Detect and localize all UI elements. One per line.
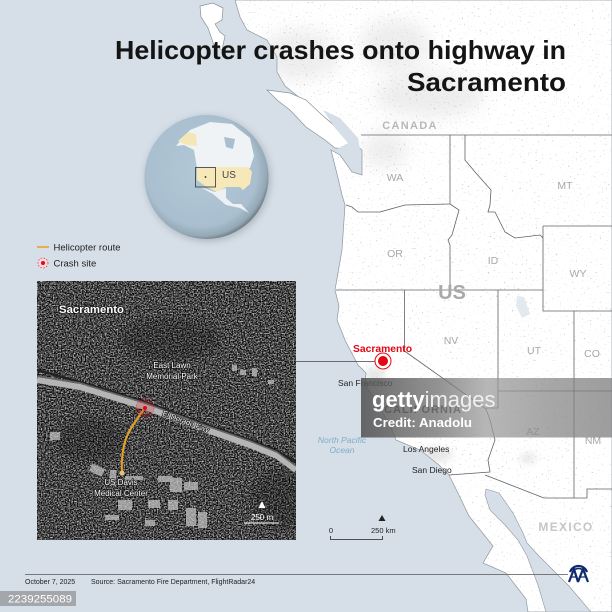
inset labels: [59, 304, 211, 498]
image ID tag: [0, 591, 76, 606]
date: October 7, 2025: [25, 579, 75, 586]
gulf of California and inland water: [323, 110, 591, 612]
inset scale bar: [244, 501, 279, 523]
inset label: El Dorado Fwy: El Dorado Fwy: [161, 409, 211, 435]
legend: helicopter route: Helicopter route: [54, 242, 121, 254]
map scale bar: 250 km: [371, 526, 396, 535]
state labels: MT: [557, 180, 573, 192]
route origin: [120, 470, 124, 476]
title line 2: Sacramento: [407, 67, 566, 97]
source: Source: Sacramento Fire Department, FlightRadar24: [91, 579, 255, 586]
legend: [37, 242, 121, 270]
state labels: NM: [585, 435, 601, 447]
state labels: UT: [527, 345, 542, 357]
Hudson Bay: [224, 137, 235, 149]
darker tree areas: [55, 318, 310, 530]
inset scale bar: 250 m: [251, 513, 273, 522]
state and country borders: [336, 135, 612, 498]
ocean label: North Pacific: [318, 435, 367, 445]
map scale bar: 0: [329, 526, 333, 535]
crash site marker: [136, 399, 154, 417]
title line 1: Helicopter crashes onto highway in: [115, 35, 566, 65]
freeway: [37, 370, 296, 470]
satellite inset map: [37, 281, 310, 540]
Sacramento label: Sacramento: [353, 343, 412, 355]
inset label: East Lawn Memorial Park: Memorial Park: [146, 372, 199, 381]
state labels: [387, 172, 601, 447]
land mass: [230, 0, 612, 612]
Anadolu Agency logo: [569, 566, 588, 582]
image ID tag: 2239255089: [8, 594, 72, 606]
globe label: US: US: [222, 170, 236, 181]
inset label: Sacramento: Sacramento: [59, 304, 124, 316]
map scale bar: [329, 515, 396, 540]
inset label: US Davis Medical Center: US Davis: [104, 478, 138, 487]
ocean label: Ocean: [329, 445, 355, 455]
country label: Mexico: MEXICO: [538, 520, 594, 534]
state labels: WY: [570, 268, 586, 280]
medical center buildings: [50, 365, 274, 528]
state labels: ID: [488, 255, 499, 267]
locator box: [196, 168, 216, 187]
Canada and north: [176, 122, 254, 168]
city label: San Diego: San Diego: [412, 465, 452, 475]
globe locator: [144, 115, 270, 241]
footer rule: [25, 574, 568, 576]
state labels: AZ: [526, 426, 540, 438]
state labels: CO: [584, 348, 600, 360]
state labels: OR: [387, 248, 403, 260]
Alaska: [178, 132, 197, 146]
contiguous United States: [197, 167, 252, 192]
inset label: US Davis Medical Center: Medical Center: [94, 489, 148, 498]
watermark: gettyimages: gettyimages: [372, 387, 495, 412]
islands: [200, 3, 358, 150]
legend: crash site: Crash site: [54, 258, 96, 270]
title: [115, 35, 566, 97]
city label: Los Angeles: Los Angeles: [403, 444, 449, 454]
Sacramento marker: [375, 353, 391, 369]
state labels: WA: [387, 172, 403, 184]
helicopter route line: [122, 408, 145, 473]
state labels: NV: [444, 335, 458, 347]
city label: San Francisco: San Francisco: [338, 378, 393, 388]
leader line from inset to Sacramento: [296, 360, 375, 362]
Mexico and central America: [200, 187, 249, 213]
inset label: East Lawn Memorial Park: East Lawn: [153, 361, 191, 370]
state label: California: CALIFORNIA: [384, 404, 462, 416]
country label: Canada: CANADA: [382, 120, 438, 132]
country label: US: US: [438, 282, 466, 304]
locator dot: [205, 176, 206, 178]
watermark band: [361, 378, 612, 438]
watermark: credit: Credit: Anadolu: [373, 415, 472, 430]
